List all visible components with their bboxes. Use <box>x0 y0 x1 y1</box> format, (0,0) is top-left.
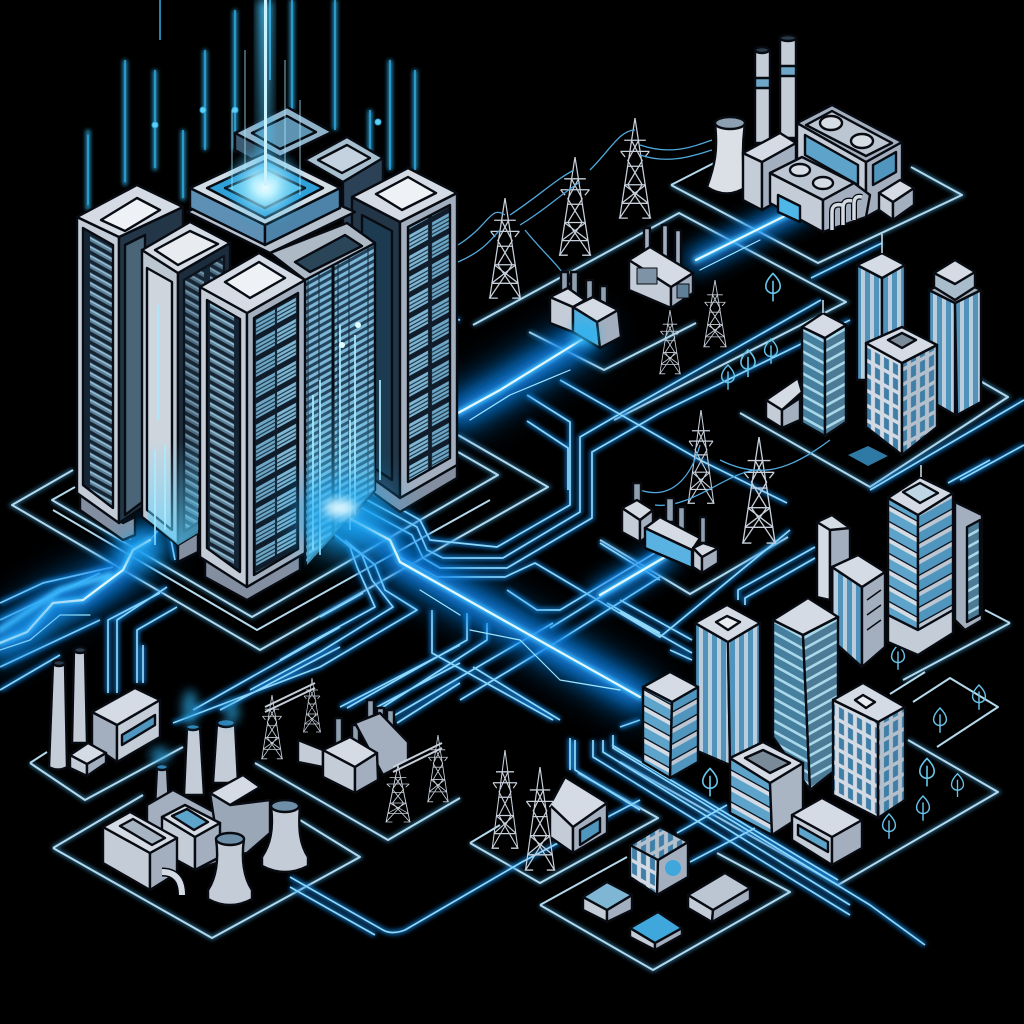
gantries <box>261 678 449 822</box>
tower: back left <box>77 185 183 540</box>
tower: middle left <box>142 222 230 562</box>
tower: centre core with glowing roof <box>187 152 355 253</box>
city block: lower right middle <box>643 598 838 790</box>
circuit traces <box>0 243 1024 945</box>
power plant: top right <box>707 35 914 232</box>
energy beams <box>0 207 803 697</box>
tree icons <box>703 274 985 839</box>
substation: mid centre <box>622 483 718 573</box>
smoke glow <box>150 690 239 763</box>
glow: vertical traces on towers <box>148 305 380 565</box>
pool glow <box>848 446 888 466</box>
platform outlines <box>12 163 1010 970</box>
beam glow at upper substation <box>571 323 599 347</box>
power plant: lower left large <box>103 719 308 905</box>
tower: back roof left <box>235 107 332 175</box>
pylons: upper left row <box>458 118 727 374</box>
city block: upper right <box>766 234 981 455</box>
city block: lower right front <box>730 683 905 865</box>
tower: centre rear <box>270 223 375 565</box>
city block: lower right rear <box>817 465 982 667</box>
substation: lower centre <box>298 700 408 793</box>
substation: upper centre <box>629 225 693 308</box>
power plant: lower left small <box>49 647 160 776</box>
tower: front <box>200 253 305 600</box>
small buildings: bottom centre <box>583 827 750 950</box>
glow: haze at tower bases <box>0 481 393 666</box>
pylons: mid centre <box>640 410 830 543</box>
glow: roof beacon <box>223 0 307 228</box>
substation: upper left <box>550 272 621 348</box>
data streams rising from the towers <box>88 0 415 210</box>
tower: back roof right <box>305 137 383 235</box>
tower: back right <box>352 168 457 512</box>
pylons and building: bottom centre <box>492 750 607 870</box>
